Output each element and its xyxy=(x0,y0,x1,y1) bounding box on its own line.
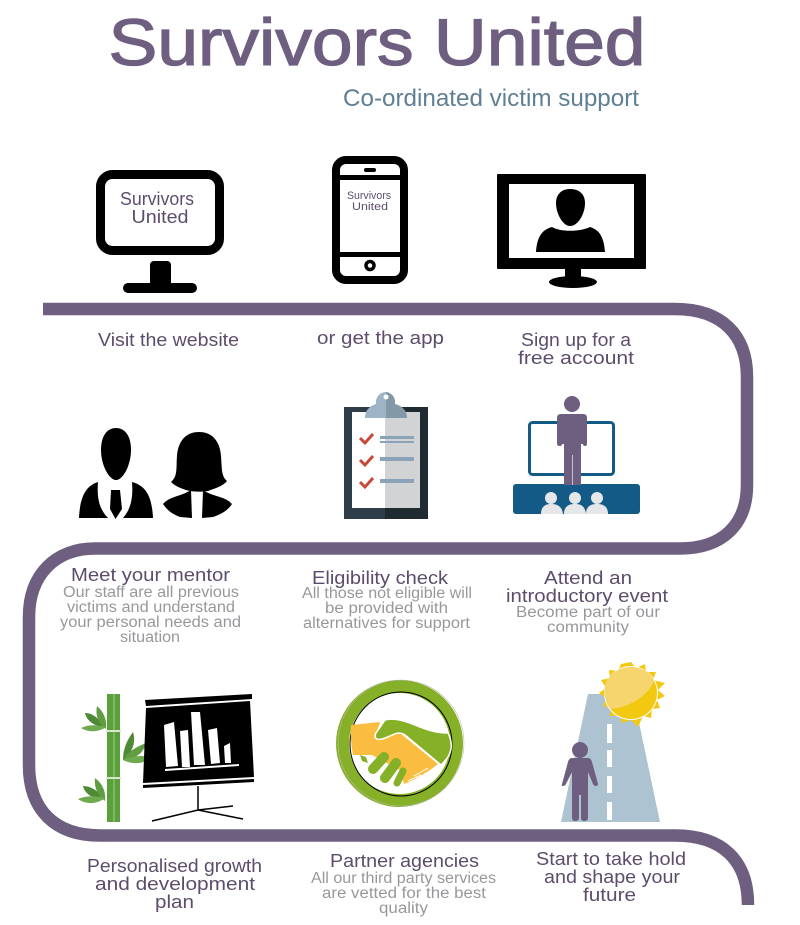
text: eligibility check: Eligibility check xyxy=(312,568,449,588)
text: attend an introductory event: community xyxy=(547,619,629,636)
icon: desktop monitor with Survivors United text: Survivors xyxy=(120,189,194,209)
caption: start to take hold: future xyxy=(583,885,636,905)
caption: personalised growth: Personalised growth xyxy=(87,856,262,876)
text: meet your mentor xyxy=(60,565,241,646)
text: meet your mentor: Our staff are all previous xyxy=(63,584,239,601)
subtitle: Co-ordinated victim support xyxy=(343,85,639,112)
icon: clipboard checklist xyxy=(344,392,428,519)
icon: smartphone with Survivors United text xyxy=(336,160,404,280)
text: attend an introductory event: Become part of our xyxy=(516,604,660,621)
caption: personalised growth: and development xyxy=(95,874,255,894)
caption: sign up: Sign up for a xyxy=(521,330,632,350)
text: eligibility check xyxy=(302,568,472,632)
text: attend an introductory event: Attend an xyxy=(544,568,632,588)
text: attend an introductory event xyxy=(506,568,668,636)
winding path xyxy=(29,309,748,905)
text: eligibility check: be provided with xyxy=(325,600,448,617)
text: partner agencies: quality xyxy=(379,900,428,917)
caption: or get the app: or get the app xyxy=(317,328,444,348)
icon: road to sun with person xyxy=(561,662,665,822)
icon: desktop monitor with Survivors United text xyxy=(100,174,220,293)
text: eligibility check: All those not eligible will xyxy=(302,585,472,602)
text: meet your mentor: Meet your mentor xyxy=(71,565,230,585)
text: partner agencies: are vetted for the best xyxy=(322,885,487,902)
title: Survivors United xyxy=(108,5,646,79)
icon: smartphone with Survivors United text: United xyxy=(352,201,388,213)
text: meet your mentor: situation xyxy=(120,629,180,646)
text: eligibility check: alternatives for support xyxy=(303,615,471,632)
text: attend an introductory event: introductory event xyxy=(506,586,668,606)
caption: personalised growth: plan xyxy=(155,892,194,912)
icon: presentation chart board xyxy=(143,694,254,821)
icon: bamboo xyxy=(78,694,153,822)
text: partner agencies: Partner agencies xyxy=(330,851,479,871)
caption: sign up xyxy=(518,330,634,368)
icon: mentors xyxy=(79,428,232,519)
caption: personalised growth xyxy=(87,856,262,912)
text: partner agencies xyxy=(311,851,496,917)
caption: sign up: free account xyxy=(518,348,634,368)
icon: monitor with person xyxy=(497,174,646,288)
icon: speaker on stage xyxy=(513,396,640,514)
text: meet your mentor: victims and understand xyxy=(67,599,235,616)
icon: smartphone with Survivors United text: Survivors xyxy=(347,190,391,202)
caption: start to take hold: Start to take hold xyxy=(536,849,686,869)
caption: start to take hold xyxy=(536,849,686,905)
caption: start to take hold: and shape your xyxy=(544,867,680,887)
icon: handshake badge xyxy=(338,680,464,806)
caption: visit the website: Visit the website xyxy=(98,330,239,350)
icon: desktop monitor with Survivors United text: United xyxy=(132,207,188,227)
text: meet your mentor: your personal needs and xyxy=(60,614,241,631)
text: partner agencies: All our third party services xyxy=(311,870,496,887)
